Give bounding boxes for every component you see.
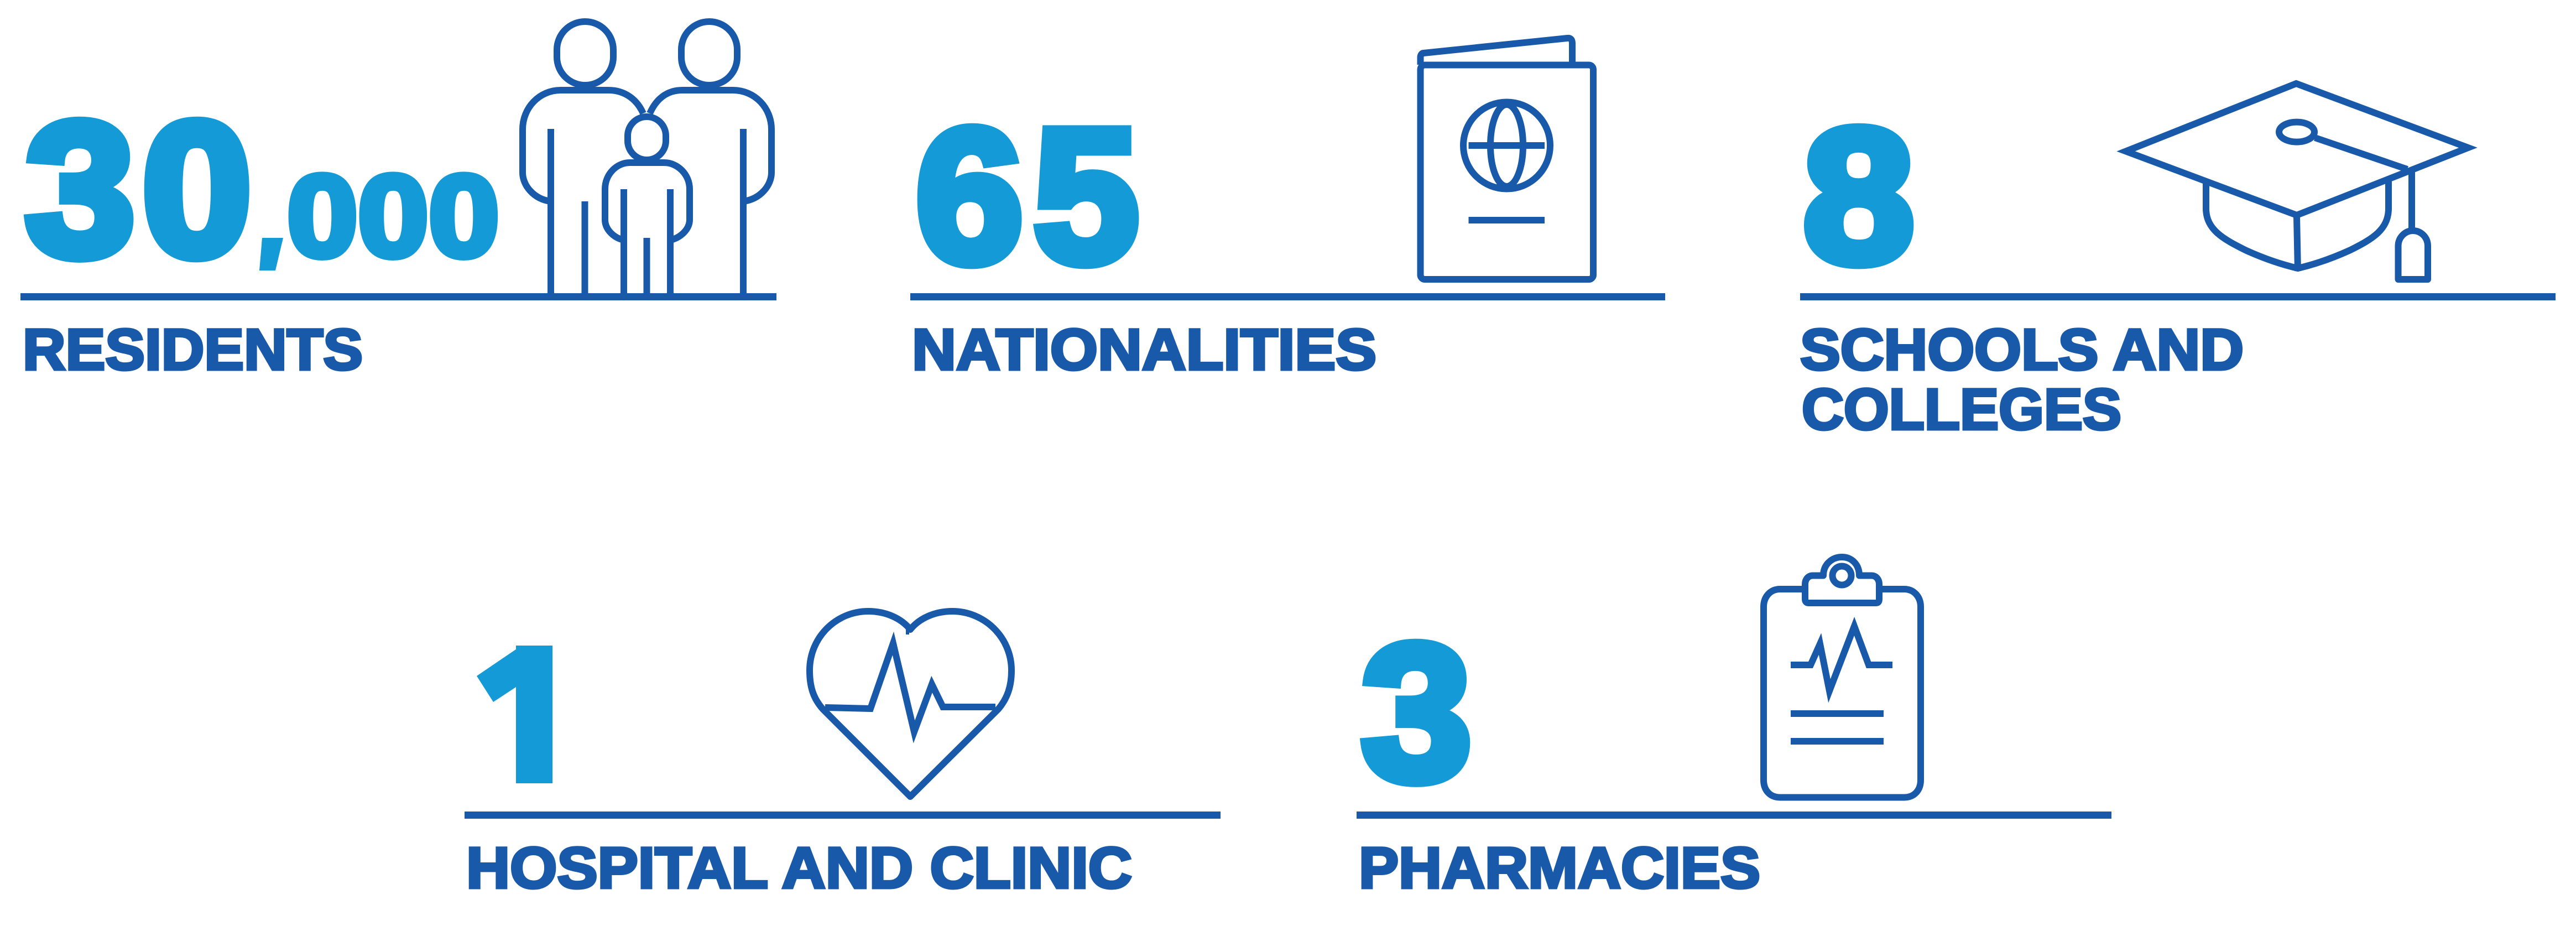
icon: graduation cap — [2126, 84, 2468, 279]
icon: passport with globe — [1420, 38, 1593, 279]
icon: family of three — [523, 22, 771, 293]
label: schools and colleges — [1800, 318, 2244, 442]
divider line — [1357, 812, 2111, 819]
label: hospital and clinic: HOSPITAL AND CLINIC — [466, 836, 1132, 901]
label: schools and colleges: SCHOOLS AND — [1800, 318, 2244, 382]
panel: pharmacies — [1357, 557, 2111, 901]
number: 30,000 residents: 3 — [25, 83, 135, 295]
panel: hospital and clinic — [465, 606, 1221, 901]
divider line — [1800, 293, 2556, 300]
number: 1 hospital and clinic: 1 — [466, 606, 588, 818]
number: 65 nationalities — [916, 90, 1139, 302]
number: 30,000 residents — [25, 72, 499, 320]
panel: schools and colleges — [1800, 84, 2556, 442]
number: 30,000 residents: , — [241, 72, 302, 320]
number: 1 hospital and clinic — [477, 646, 552, 783]
panel: residents — [20, 22, 776, 382]
icon: heart with pulse — [810, 611, 1011, 797]
label: residents: RESIDENTS — [23, 318, 363, 382]
number: 65 nationalities: 5 — [1034, 90, 1139, 302]
divider line — [20, 293, 776, 300]
number: 30,000 residents: 0 — [142, 83, 252, 295]
panel: nationalities — [910, 38, 1665, 382]
label: nationalities: NATIONALITIES — [912, 318, 1376, 382]
label: schools and colleges: COLLEGES — [1802, 377, 2121, 442]
number: 30,000 residents: 000 — [287, 151, 499, 281]
number: 8 schools and colleges: 8 — [1803, 90, 1914, 302]
label: pharmacies: PHARMACIES — [1359, 836, 1760, 901]
number: 65 nationalities: 6 — [916, 90, 1023, 302]
divider line — [910, 293, 1665, 300]
number: 3 pharmacies: 3 — [1362, 605, 1472, 821]
divider line — [465, 812, 1221, 819]
icon: clipboard with pulse — [1764, 557, 1921, 798]
